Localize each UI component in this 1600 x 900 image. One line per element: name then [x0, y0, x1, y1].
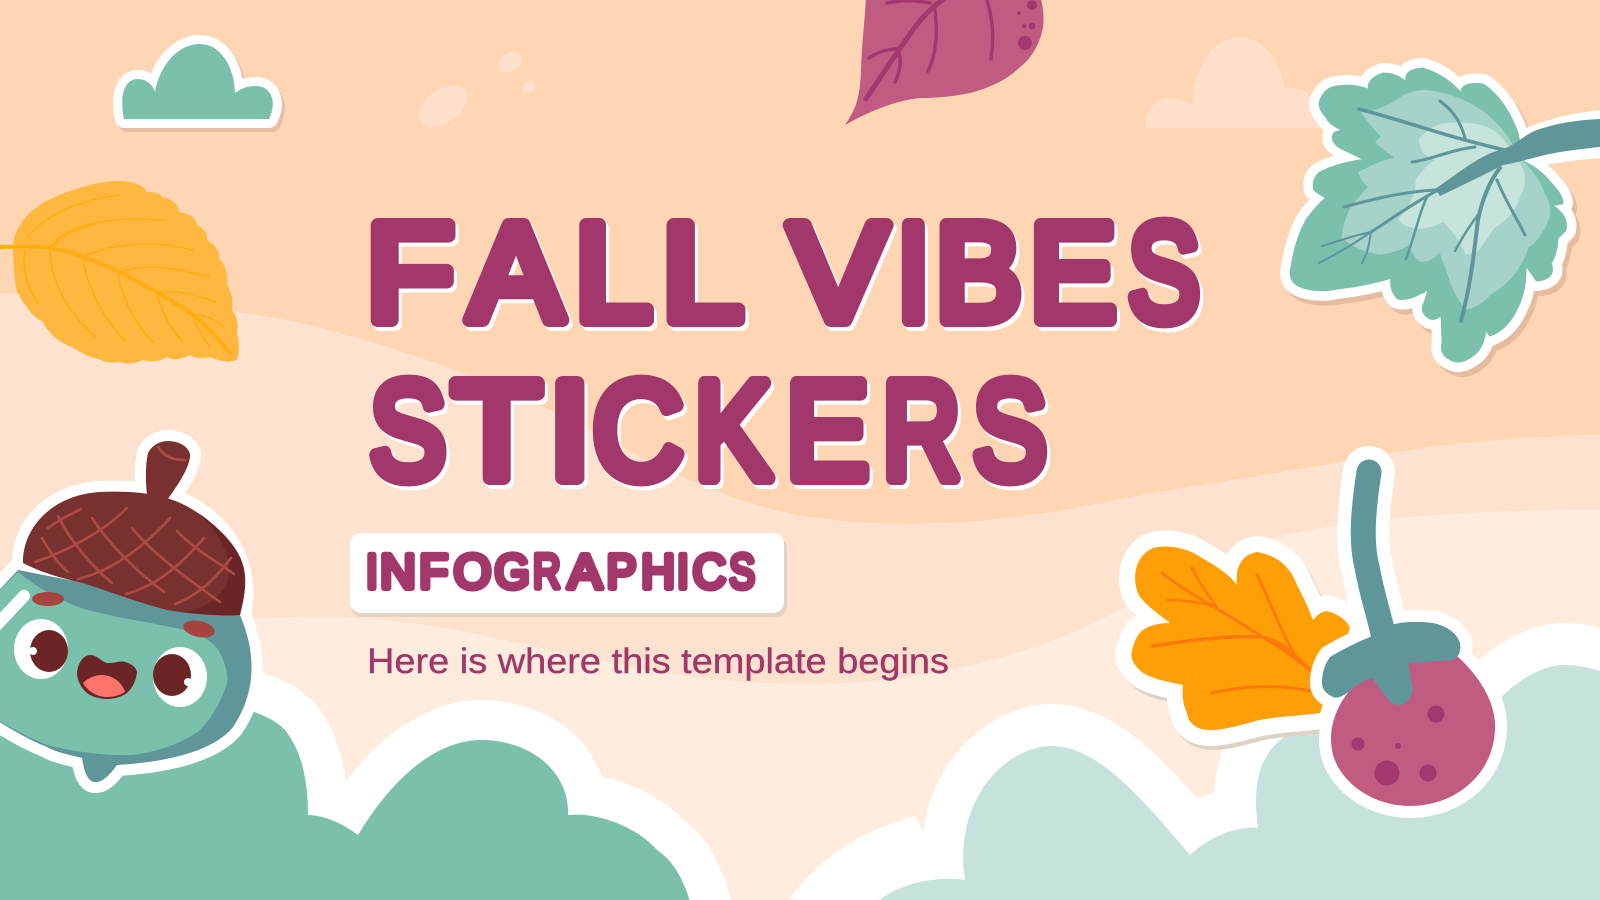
acorn highlight — [0, 596, 24, 630]
title line 2: S — [973, 354, 1047, 508]
badge text: S — [729, 546, 755, 599]
acorn body light — [0, 572, 227, 755]
title line 1: A — [469, 196, 563, 350]
leaf: purple top — [845, 0, 1044, 125]
leaf: yellow — [0, 181, 239, 364]
berry dots — [1352, 706, 1444, 786]
title line 2: C — [593, 354, 683, 508]
title line 1: L — [575, 196, 652, 350]
title line 1: B — [936, 196, 1022, 350]
background: light wave — [0, 510, 1600, 900]
title shadow: S — [373, 358, 449, 512]
title line 2: R — [883, 354, 960, 508]
acorn cap shade — [185, 514, 245, 615]
subtitle badge — [350, 533, 787, 617]
acorn tongue — [83, 675, 125, 697]
badge text: N — [380, 546, 416, 599]
title shadow: L — [665, 200, 742, 354]
title shadow: R — [886, 358, 963, 512]
badge text: C — [693, 546, 726, 599]
acorn cheeks — [32, 592, 64, 606]
berry body — [1331, 640, 1495, 806]
berry stem — [1363, 472, 1383, 633]
title shadow: A — [472, 200, 566, 354]
big cloud: pale green right — [786, 665, 1600, 900]
sticker: acorn character — [0, 441, 252, 782]
title shadow: K — [698, 358, 774, 512]
title line 2: S — [370, 354, 446, 508]
title shadow: V — [792, 200, 890, 354]
badge text: R — [533, 546, 560, 599]
tagline: Here is where this template begins — [367, 642, 949, 681]
title shadow: I — [552, 358, 594, 512]
title line 1: F — [366, 196, 454, 350]
acorn right eye — [153, 647, 207, 707]
title line 2: I — [549, 354, 591, 508]
sticker: teal leaf with stem — [1291, 69, 1600, 366]
badge text: I — [677, 546, 689, 599]
title line 1: I — [897, 196, 930, 350]
title line 1: E — [1030, 196, 1116, 350]
badge text: O — [454, 546, 491, 599]
title — [366, 196, 1203, 512]
title line 1: S — [1128, 196, 1200, 350]
title line 2: K — [695, 354, 771, 508]
title shadow: F — [369, 200, 457, 354]
badge text: F — [419, 546, 448, 599]
badge text: I — [366, 546, 378, 599]
title shadow: T — [456, 358, 544, 512]
faint blobs — [411, 48, 538, 135]
title line 1: V — [789, 196, 887, 350]
title shadow: S — [1131, 200, 1203, 354]
background: middle wave — [0, 293, 1600, 900]
title shadow: E — [1033, 200, 1119, 354]
badge text: H — [641, 546, 675, 599]
title line 2: T — [453, 354, 541, 508]
title shadow: L — [578, 200, 655, 354]
title shadow: S — [976, 358, 1050, 512]
title line 1: L — [662, 196, 739, 350]
acorn mouth — [77, 655, 137, 699]
title shadow: B — [938, 200, 1025, 354]
berry cap — [1322, 622, 1460, 705]
sticker: small green cloud — [122, 44, 276, 123]
acorn cap — [23, 492, 242, 615]
acorn body shade — [0, 570, 252, 782]
big cloud: green left — [0, 690, 698, 900]
acorn cap lattice — [35, 447, 234, 604]
acorn white outline — [0, 441, 252, 782]
badge text: P — [607, 546, 636, 599]
title shadow: I — [900, 200, 933, 354]
title shadow: C — [596, 358, 686, 512]
title line 2: E — [786, 354, 869, 508]
badge text: G — [494, 546, 530, 599]
acorn left eye — [14, 619, 68, 679]
acorn cap stem — [146, 441, 190, 500]
sticker: berry — [1322, 472, 1495, 806]
title shadow — [369, 200, 1203, 512]
sticker: orange leaf — [1131, 547, 1353, 734]
berry outline — [1322, 472, 1495, 806]
badge text: A — [568, 546, 602, 599]
faint cloud top right — [1146, 37, 1325, 128]
title shadow: E — [789, 358, 872, 512]
